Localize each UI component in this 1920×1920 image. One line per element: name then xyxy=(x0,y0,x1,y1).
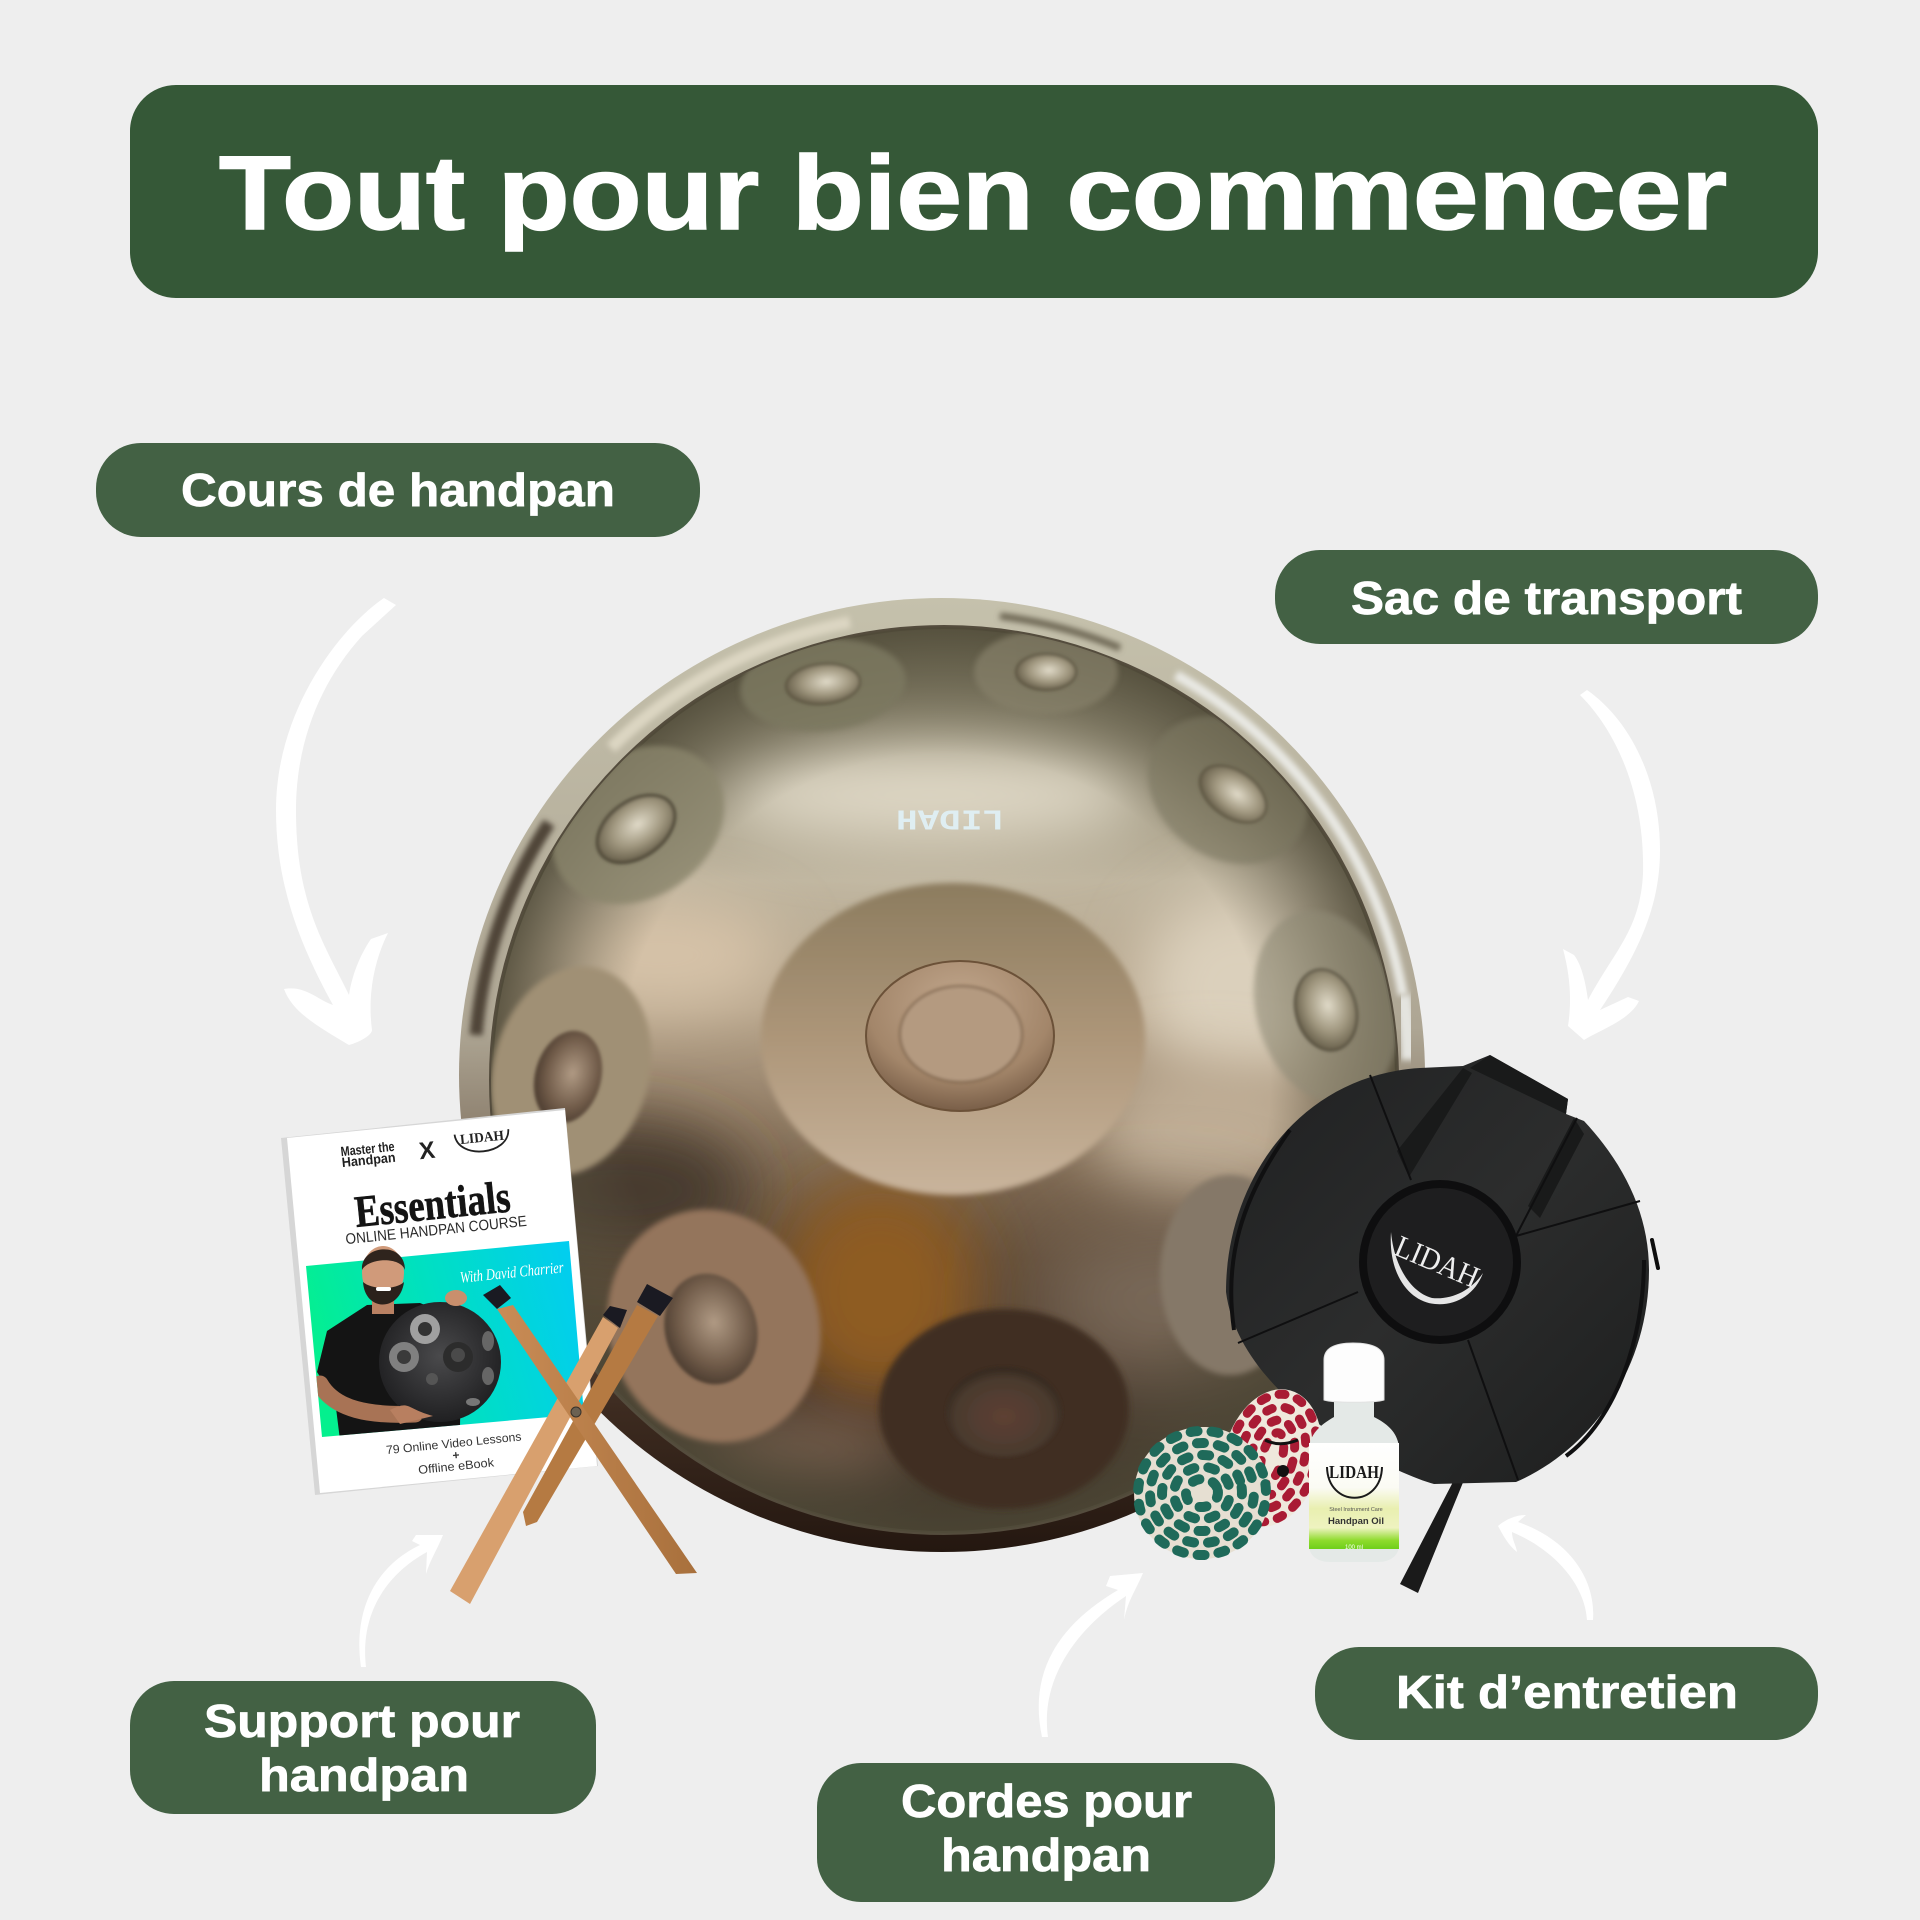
label: Support pour handpan: handpan xyxy=(259,1749,469,1801)
Master the Handpan logo: Master the xyxy=(340,1139,396,1159)
metal shading xyxy=(468,627,1419,1533)
label: Sac de transport xyxy=(1275,550,1818,644)
bottle label text: LIDAH xyxy=(1329,1462,1379,1482)
label: Support pour handpan: Support pour xyxy=(204,1695,520,1747)
plus sign: + xyxy=(452,1448,460,1462)
book gradient panel xyxy=(306,1241,584,1437)
book text xyxy=(336,1123,584,1482)
cord knot xyxy=(1265,1440,1298,1477)
note dimple: lower left xyxy=(652,1263,770,1395)
presenter head xyxy=(362,1246,405,1314)
stand long leg xyxy=(450,1317,618,1604)
bag centre disc: LIDAH xyxy=(1390,1228,1485,1295)
note dimple: right xyxy=(1286,963,1366,1057)
bag zipper edge xyxy=(1231,1130,1644,1456)
handpan body xyxy=(491,627,1397,1533)
note ring: upper left xyxy=(551,744,726,906)
note ring: right xyxy=(1251,914,1396,1098)
note dimple: bottom xyxy=(946,1367,1062,1457)
bag centre disc xyxy=(1359,1180,1521,1344)
arrow: cords label to cords xyxy=(1039,1573,1143,1737)
stand front leg xyxy=(497,1305,697,1574)
bag zip pull xyxy=(1652,1240,1658,1268)
title banner xyxy=(130,85,1818,298)
book cover xyxy=(281,1108,598,1495)
bottle cap xyxy=(1324,1343,1384,1402)
stand bolt xyxy=(571,1407,581,1417)
engraved brand mark: LIDAH xyxy=(896,802,1004,834)
bag seams xyxy=(1238,1075,1640,1480)
book text: Handpan xyxy=(341,1150,396,1170)
label: Cours de handpan: Cours de handpan xyxy=(181,464,615,516)
handpan rim xyxy=(459,598,1425,1552)
label: Cordes pour handpan: Cordes pour xyxy=(901,1775,1192,1827)
stand rear leg xyxy=(523,1305,658,1526)
Essentials title: Essentials xyxy=(352,1171,513,1237)
LIDAH logo xyxy=(454,1128,510,1154)
bag straps xyxy=(1397,1055,1584,1218)
label: Cordes pour handpan xyxy=(817,1763,1275,1902)
label: Support pour handpan xyxy=(130,1681,596,1814)
title text: Tout pour bien commencer xyxy=(219,135,1727,252)
rim reflections xyxy=(476,616,1409,1060)
course subtitle: ONLINE HANDPAN COURSE xyxy=(345,1213,528,1248)
note dimple: upper right xyxy=(1189,754,1277,834)
body edge vignette xyxy=(491,627,1397,1533)
note dimple: top left xyxy=(784,661,862,707)
bag bottom strap xyxy=(1400,1480,1464,1593)
handpan cords xyxy=(1125,1378,1336,1568)
central ding ring xyxy=(761,883,1145,1195)
note ring: top xyxy=(974,630,1118,714)
online course book xyxy=(281,1108,598,1495)
bottle label text: Steel Instrument Care xyxy=(1329,1507,1383,1513)
note ring: lower right xyxy=(1160,1173,1260,1378)
handpan xyxy=(459,598,1425,1552)
green cord coil xyxy=(1125,1418,1279,1568)
label: Sac de transport: Sac de transport xyxy=(1351,572,1742,624)
arrow: stand label to stand xyxy=(359,1535,443,1667)
mini handpan xyxy=(379,1290,501,1424)
bag body xyxy=(1226,1055,1649,1484)
label: Cours de handpan xyxy=(96,443,700,537)
arrow: course label to book xyxy=(276,598,396,1045)
note ring: left xyxy=(491,967,651,1178)
note ring: top left xyxy=(739,638,905,732)
care oil bottle xyxy=(1309,1343,1399,1562)
transport bag xyxy=(1226,1055,1658,1593)
note dimple: top xyxy=(1016,654,1076,690)
X separator: X xyxy=(418,1137,436,1165)
bottle label text xyxy=(1327,1462,1384,1551)
note ring: lower left xyxy=(604,1206,824,1446)
course presenter xyxy=(317,1303,462,1440)
label: Kit d'entretien: Kit d’entretien xyxy=(1396,1666,1738,1718)
note dimple: left xyxy=(524,1023,612,1131)
handpan stand xyxy=(450,1284,697,1604)
LIDAH logo: LIDAH xyxy=(459,1129,505,1148)
bottle label text: Handpan Oil xyxy=(1328,1516,1384,1527)
central ding xyxy=(866,961,1054,1111)
note dimple: upper left xyxy=(585,781,687,877)
stand caps xyxy=(483,1284,673,1328)
bottle glass xyxy=(1309,1400,1399,1562)
label: Cordes pour handpan: handpan xyxy=(941,1829,1151,1881)
red cord coil xyxy=(1208,1378,1336,1538)
presenter credit: With David Charrier xyxy=(459,1259,565,1287)
bottle label text: 100 ml xyxy=(1345,1545,1363,1551)
ebook line: Offline eBook xyxy=(418,1455,496,1477)
arrow: bag label to bag xyxy=(1563,690,1660,1040)
label: Kit d'entretien xyxy=(1315,1647,1818,1740)
lessons line: 79 Online Video Lessons xyxy=(385,1429,522,1457)
note ring: bottom xyxy=(879,1309,1129,1509)
arrow: care kit label to bottle xyxy=(1498,1515,1593,1620)
bottle label xyxy=(1309,1443,1399,1549)
note ring: upper right xyxy=(1148,714,1308,865)
